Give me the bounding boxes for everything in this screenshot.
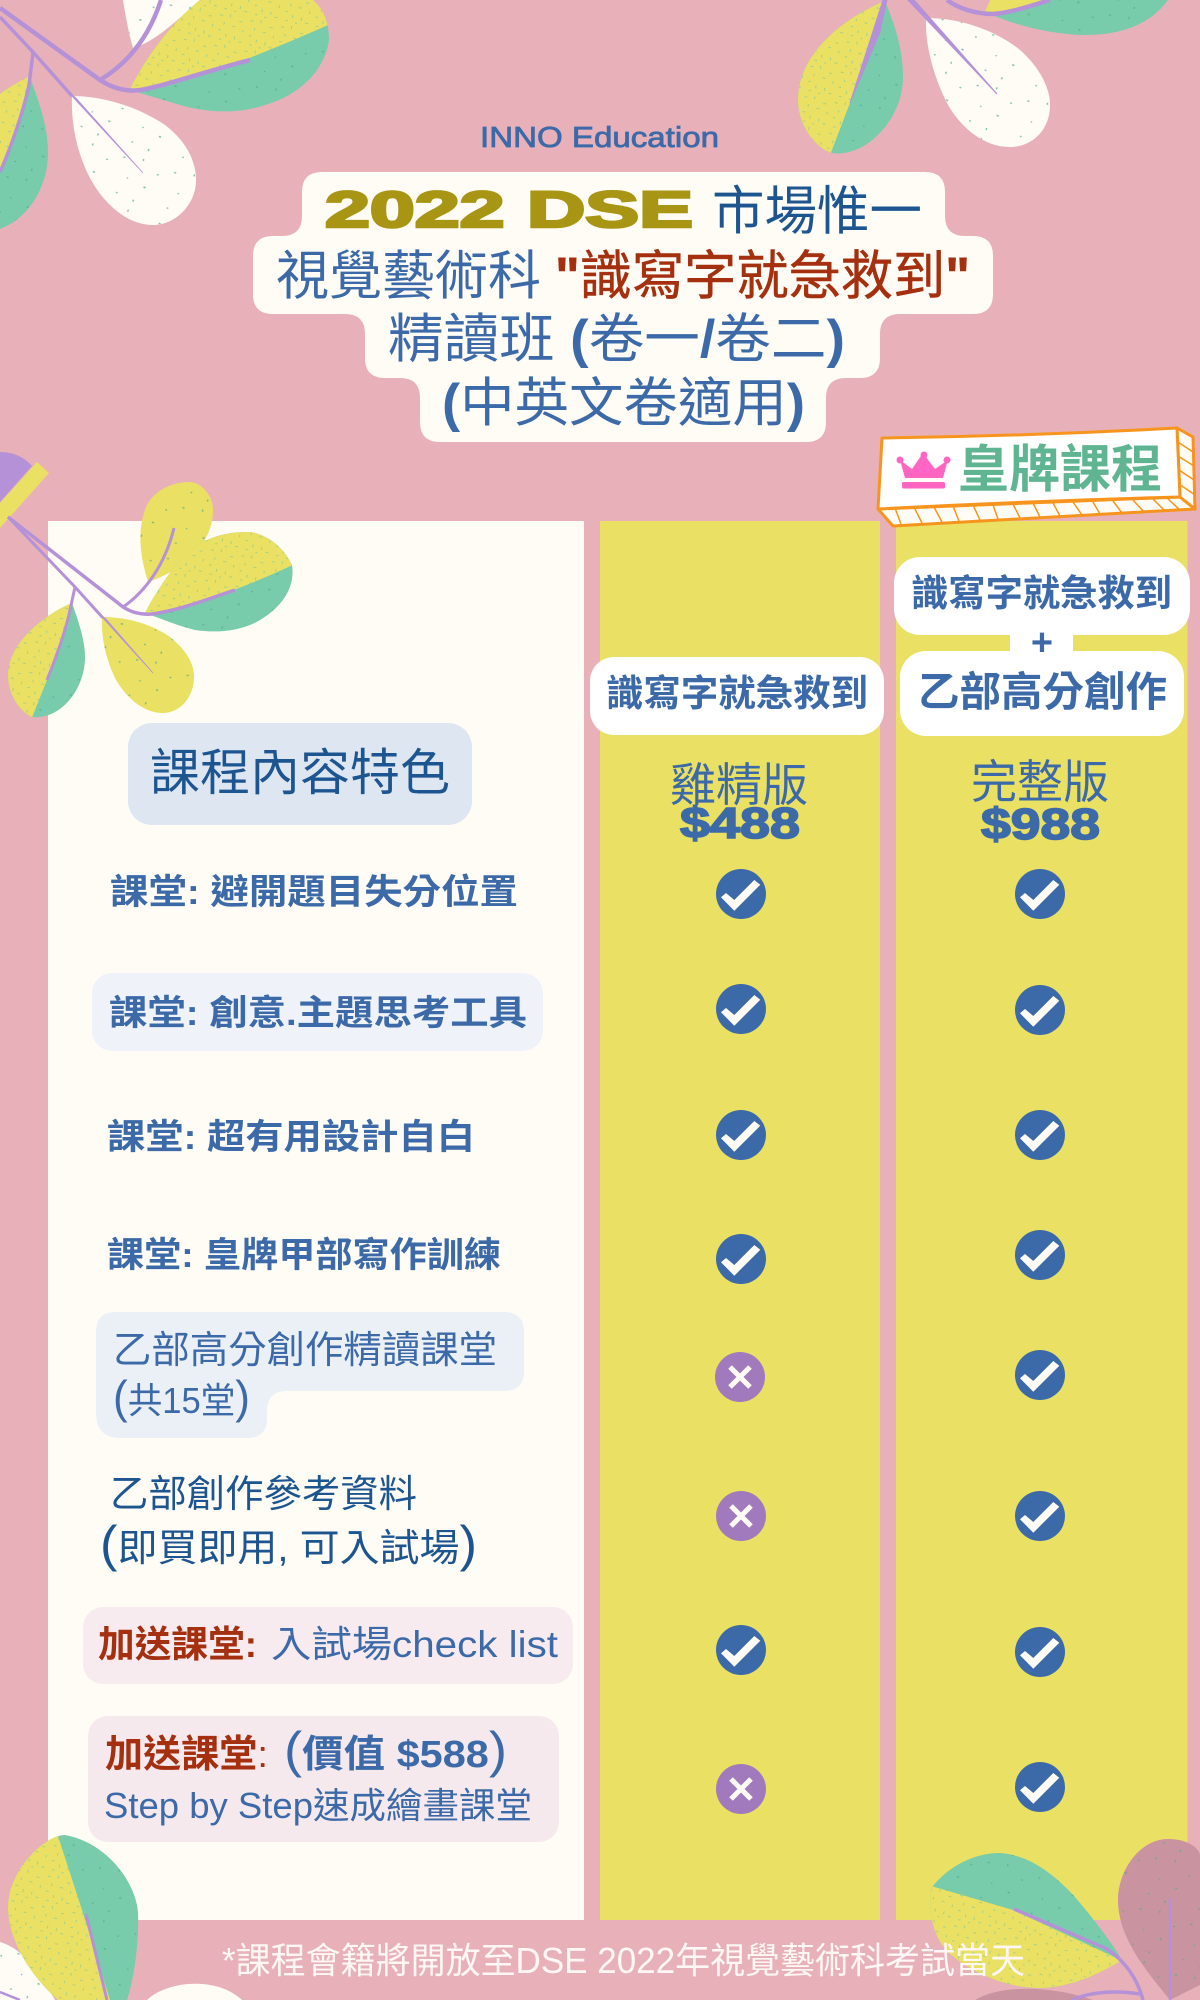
title block: "識寫字就急救到": [555, 247, 970, 306]
panel: full plan column: [896, 521, 1188, 1920]
row 8 label: (價值 $588 ): [284, 1722, 507, 1778]
row 8 label: 加送課堂:: [105, 1734, 268, 1776]
title block: [253, 172, 993, 442]
title block: 精讀班 (卷一/卷二): [388, 310, 845, 369]
panel: features column: [48, 521, 584, 1920]
title block: 市場惟一: [712, 182, 922, 241]
price: full plan: 完整版: [971, 756, 1109, 808]
price: full plan: $988: [981, 800, 1100, 849]
row 8 label: Step by Step速成繪畫課堂: [104, 1785, 532, 1826]
row 3 label: 課堂: 超有用設計自白: [107, 1118, 475, 1157]
decoration: top-right leaves: [795, 0, 1170, 160]
icons: essence plan marks: [715, 869, 766, 1814]
row 7 label: [83, 1607, 573, 1684]
row 6 label: (即買即用, 可入試場 ): [100, 1516, 477, 1572]
decoration: bottom-left leaves: [0, 1833, 242, 2000]
plan label: essence: [590, 657, 884, 735]
footnote: *課程會籍將開放至DSE 2022年視覺藝術科考試當天: [222, 1940, 1025, 1981]
price: full plan: [971, 756, 1109, 849]
decoration: top-left leaves: [0, 0, 335, 230]
badge: flagship course: [878, 428, 1195, 526]
icon: crown: [896, 452, 950, 488]
row 5 label: 乙部高分創作精讀課堂: [113, 1330, 497, 1372]
row 6 label: 乙部創作參考資料: [110, 1474, 417, 1516]
title block: 視覺藝術科: [276, 247, 541, 306]
plan label: full: +: [1031, 622, 1053, 664]
plan label: full: 識寫字就急救到: [911, 573, 1172, 614]
row 2 label: 課堂: 創意.主題思考工具: [109, 994, 527, 1033]
plan label: full: [894, 557, 1190, 736]
plan label: full: 乙部高分創作: [918, 669, 1167, 715]
row 2 label: [92, 973, 543, 1051]
row 4 label: 課堂: 皇牌甲部寫作訓練: [107, 1236, 501, 1275]
decoration: bottom-right leaves: [928, 1839, 1200, 2000]
price: essence plan: [670, 759, 808, 848]
decoration: middle-left leaves: [0, 452, 295, 720]
row 1 label: 課堂: 避開題目失分位置: [110, 873, 518, 912]
heading: course features: [128, 723, 472, 825]
price: essence plan: 雞精版: [670, 759, 808, 811]
panel: essence plan column: [600, 521, 880, 1920]
price: essence plan: $488: [680, 799, 800, 848]
title block: (中英文卷適用): [442, 374, 805, 433]
plan label: essence: 識寫字就急救到: [606, 673, 868, 714]
row 7 label: 加送課堂:: [98, 1624, 257, 1665]
row 5 label: [96, 1312, 524, 1438]
title block: 2022 DSE: [325, 181, 693, 238]
badge: flagship course: 皇牌課程: [958, 441, 1162, 498]
brand name: INNO Education: [480, 122, 719, 154]
row 6 label: [100, 1474, 477, 1572]
row 7 label: 入試場check list: [271, 1624, 559, 1665]
heading: course features: 課程內容特色: [150, 745, 450, 801]
row 5 label: (共15堂): [113, 1371, 250, 1423]
icons: full plan marks: [1015, 869, 1065, 1812]
row 8 label: [88, 1716, 559, 1842]
